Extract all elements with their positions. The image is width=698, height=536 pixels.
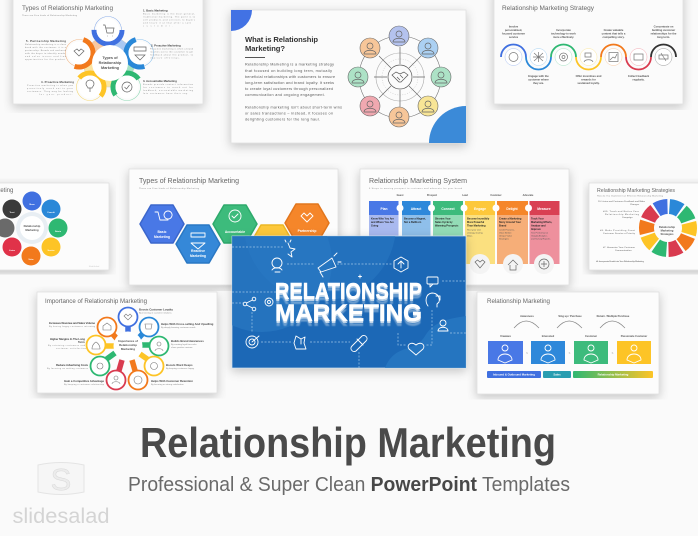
slide: relationship marketing system: Advocate: [523, 194, 534, 197]
slide: relationship marketing system: Story Around Your: [499, 221, 521, 224]
slide: relationship marketing strategies, ring: How do You Implement an Effective Relationship Marketing: [597, 194, 664, 198]
slide: types of relationship marketing, pentagon: Relationship marketing is a close: [25, 43, 67, 46]
slide: circular steps, left edge: Marketing: [25, 228, 39, 232]
slide: relationship marketing strategies, ring: #8. Make Providing Great: [600, 229, 635, 232]
slide: types of relationship marketing, pentagon: [13, 0, 203, 107]
slide: types of relationship marketing, hexagons: There are Five kinds of Relationship Marketing: [139, 187, 200, 190]
slide: relationship marketing system: Sales Cycle by: [435, 221, 453, 224]
hero icons: [243, 240, 448, 355]
slide: relationship marketing strategy, wave: building customer: [652, 28, 675, 32]
network diagram: [348, 26, 451, 127]
slide: types of relationship marketing, pentagon: proactively reach out to your: [27, 87, 73, 90]
hero title: MARKETING: [275, 302, 422, 329]
slide: relationship marketing strategy, wave: Offer incentives and: [576, 74, 602, 78]
slide: relationship marketing strategy, wave: Create valuable: [604, 28, 624, 32]
slide: relationship marketing system: Relationship Marketing System: [369, 178, 467, 185]
slide: relationship marketing system: [360, 169, 569, 285]
slide: types of relationship marketing, pentagon: bond with the customer: it is a: [25, 46, 67, 49]
body text: or sales transactions – instead, it focuses on: [245, 112, 333, 116]
slide: relationship marketing system: Improve: [531, 228, 541, 231]
body text: Relationship Marketing is a marketing strategy: [245, 62, 334, 66]
slide: relationship marketing customer journey: [477, 292, 659, 394]
slide: relationship marketing strategies, ring: Customer Service a Priority: [603, 232, 636, 235]
slide: relationship marketing system: Prospect: [427, 194, 437, 197]
slide: what is relationship marketing: Marketing?: [245, 44, 285, 53]
slide: types of relationship marketing, pentagon: 4. Proactive Marketing: [41, 80, 74, 84]
slide: importance of relationship marketing: Builds Brand Awareness: [171, 339, 204, 343]
slide: types of relationship marketing, hexagons: Basic: [157, 230, 167, 234]
hero title: RELATIONSHIP: [275, 280, 422, 306]
slide: importance of relationship marketing: By focusing on making customers: [47, 367, 89, 370]
slide: types of relationship marketing, pentagon: Types of Relationship Marketing: [22, 5, 113, 12]
slide: importance of relationship marketing: By creating loyal fans who: [171, 343, 197, 346]
slide: relationship marketing system: Unique Value: [499, 236, 513, 238]
slide: circular steps, left edge: Value: [28, 259, 34, 261]
slide: relationship marketing system: Going: [371, 224, 379, 228]
slide: importance of relationship marketing: Higher Margins In The Long: [50, 337, 85, 341]
slide: types of relationship marketing, pentagon: Types of: [102, 56, 118, 60]
slide: relationship marketing system: Value Before: [499, 232, 512, 234]
slide: relationship marketing strategy, wave: they are.: [533, 81, 544, 85]
slide: relationship marketing system: Know Who You Are: [371, 218, 394, 220]
slide: relationship marketing strategy, wave: customer where: [528, 78, 549, 82]
slide: importance of relationship marketing: By focusing on strong satisfaction: [151, 383, 184, 386]
slide: relationship marketing system: More Powerful: [467, 221, 485, 224]
slide: relationship marketing customer journey: Interested: [542, 334, 555, 338]
slide: types of relationship marketing, pentagon: reaches out to the customer to get: [150, 50, 193, 54]
slide: types of relationship marketing, pentagon: partnership. Brands ask and work: [25, 49, 67, 52]
slide: importance of relationship marketing: Boosts Word Keeps: [166, 363, 193, 367]
slide: relationship marketing strategy, wave: more effectively.: [553, 35, 574, 39]
slide: importance of relationship marketing: Term: [78, 340, 85, 344]
slide: importance of relationship marketing: Marketing: [121, 347, 135, 351]
slide: importance of relationship marketing: customer satisfaction: [56, 347, 87, 350]
slide: importance of relationship marketing: By keeping a customer relationship: [64, 383, 105, 386]
slide: circular steps, left edge: Listen: [9, 249, 16, 252]
hero title: MARKETING: [275, 300, 422, 327]
hero title: MARKETING: [275, 305, 422, 332]
slide: relationship marketing strategy, wave: sustained loyalty.: [577, 81, 600, 85]
slide: relationship marketing strategy, wave: Incorporate: [556, 28, 571, 32]
slide: relationship marketing strategy, wave: rewards for: [581, 78, 596, 82]
slide: circular steps, left edge: Service: [47, 250, 55, 252]
slide: relationship marketing strategies, ring: Changes: [630, 204, 640, 206]
slide: relationship marketing customer journey: Inbound & Outbound Marketing: [493, 372, 535, 376]
body text: beneficial relationships with customers to ensure: [245, 75, 335, 79]
slide: relationship marketing customer journey: Relationship Marketing: [487, 299, 550, 305]
slide: relationship marketing system: Connect: [441, 207, 455, 211]
slide: importance of relationship marketing: Importance of: [118, 339, 138, 343]
slide: relationship marketing system: Not a Bullhorn: [404, 221, 422, 224]
slide: relationship marketing strategies, ring: Relationship Marketing Strategies: [597, 188, 675, 194]
slide: types of relationship marketing, pentagon: Relationship: [99, 61, 122, 65]
slide: relationship marketing system: Shorten Your: [435, 218, 451, 220]
hero title: RELATIONSHIP: [275, 278, 422, 304]
slide: relationship marketing customer journey: Customer: [585, 334, 597, 338]
slide: types of relationship marketing, hexagons: [129, 169, 338, 285]
slide: what is relationship marketing: [226, 8, 472, 152]
slide: types of relationship marketing, pentagon: Proactive marketing is when you: [27, 84, 74, 87]
slide: relationship marketing strategy, wave: regularly.: [633, 78, 645, 82]
slide: relationship marketing strategy, wave: Involve: [509, 24, 519, 28]
slide: relationship marketing customer journey: Return / Multiple Purchase: [597, 314, 630, 318]
background blobs: [232, 236, 466, 368]
hero title: [275, 278, 422, 332]
slide: relationship marketing system: Credit Features,: [499, 228, 515, 232]
slide: relationship marketing customer journey: Passionate Customer: [621, 334, 647, 338]
slide: relationship marketing strategy, wave: Engage with the: [528, 74, 549, 78]
slide: relationship marketing system: Attract: [411, 207, 422, 211]
slide: types of relationship marketing, pentagon: Brands provide contact information: [143, 83, 194, 86]
slide: relationship marketing customer journey: >: [569, 351, 571, 355]
slide: relationship marketing strategies, ring: Campaign: [622, 217, 633, 219]
slide: importance of relationship marketing: Importance of Relationship Marketing: [45, 298, 147, 305]
body text: that focused on building long term, mutually: [245, 69, 332, 73]
slide: importance of relationship marketing: Gain a Competitive Advantage: [64, 379, 104, 383]
slide: relationship marketing strategy, wave: [494, 0, 683, 104]
slide: types of relationship marketing, pentagon: feedback, accountable marketing: [143, 89, 194, 92]
slide: importance of relationship marketing: Helps With Customer Retention: [151, 379, 193, 383]
slide: relationship marketing strategy, wave: Concentrate on: [654, 24, 674, 28]
slide: relationship marketing strategy, wave: Collect feedback: [628, 74, 650, 78]
slide: relationship marketing strategies, ring: Strategies: [660, 232, 674, 236]
slide: types of relationship marketing, hexagons: Marketing: [190, 254, 206, 258]
slide: types of relationship marketing, pentagon: 3. Accountable Marketing: [143, 79, 177, 83]
slide: importance of relationship marketing: [37, 292, 217, 393]
slide: relationship marketing system: Delight: [506, 207, 518, 211]
slide: types of relationship marketing, pentagon: for customers to reach out for: [143, 86, 193, 89]
main title: Relationship Marketing: [140, 419, 556, 466]
slide: relationship marketing system: Test Performance: [531, 232, 549, 234]
slide: relationship marketing system: Analyze and: [531, 224, 546, 228]
hero slide: relationship marketing cover: [226, 234, 472, 376]
slide: importance of relationship marketing: By keeping customers happy: [166, 367, 195, 370]
slide: relationship marketing strategies, ring: [589, 183, 698, 270]
slide: relationship marketing strategies, ring: #09. Track and Notice Your: [603, 210, 639, 213]
slide: importance of relationship marketing: Relationship: [119, 343, 137, 347]
slide: relationship marketing system: Engage: [474, 207, 486, 211]
slide: types of relationship marketing, pentagon: Basic marketing is the most general,: [143, 12, 195, 16]
slide: circular steps, left edge: Relationship: [24, 224, 41, 228]
slide: relationship marketing system: Become a Magnet,: [404, 218, 426, 220]
slidesalad logo: S: [51, 462, 71, 497]
slide: relationship marketing customer journey: Relationship Marketing: [598, 372, 629, 376]
slide: relationship marketing system: Lead: [462, 194, 468, 197]
slidesalad logo: slidesalad: [12, 505, 110, 528]
body text: [245, 62, 342, 122]
heading: What is Relationship: [245, 35, 318, 44]
slide: relationship marketing strategies, ring: Relationship: [659, 225, 675, 229]
slide: relationship marketing system: Google Analytics: [531, 234, 548, 238]
slide: types of relationship marketing, pentagon: sell products and services to buyers: [143, 18, 196, 22]
slide: relationship marketing system: Guest: [397, 194, 404, 197]
hero title: RELATIONSHIP: [275, 283, 422, 309]
slide: types of relationship marketing, pentagon: for your product.: [39, 93, 73, 96]
slide: relationship marketing strategy, wave: personalized,: [505, 28, 522, 32]
subtitle: Professional & Super Clean PowerPoint Templates: [128, 473, 570, 496]
slide: types of relationship marketing, hexagons: Accountable: [225, 230, 245, 234]
slide: relationship marketing customer journey: Unaware: [500, 334, 511, 338]
slide: importance of relationship marketing: Reduce Advertising Costs: [56, 363, 88, 367]
slide: relationship marketing strategies, ring: 10. Listen and Customer Feedback and Make: [598, 200, 646, 203]
slide: relationship marketing system: Measure: [537, 207, 551, 211]
body text: to create loyal customers through personalized: [245, 87, 333, 91]
body text: delighting customers for the long haul.: [245, 118, 320, 122]
slide: relationship marketing customer journey: Sales: [553, 372, 561, 376]
slide: relationship marketing strategies, ring: Communication: [615, 249, 632, 252]
dashed connector lines: [232, 247, 466, 368]
slide: importance of relationship marketing: By deeply knowing customer needs: [161, 326, 196, 329]
slide: types of relationship marketing, pentagon: lets customers have their say.: [143, 92, 188, 95]
slide: types of relationship marketing, pentagon: with the buyer to identify needs,: [25, 52, 66, 55]
slide: relationship marketing system: Strategies: [499, 238, 510, 240]
slide: types of relationship marketing, pentagon: customers. They may be looking: [27, 90, 74, 93]
slide: types of relationship marketing, pentagon: Proactive marketing is when a brand: [150, 48, 194, 50]
slide: circular steps, left edge: [0, 183, 109, 270]
slide: relationship marketing strategies, ring: #6. Incorporate Emails into Your Relationship Marketing: [596, 260, 645, 263]
body text: long-term satisfaction and brand loyalty. It seeks: [245, 81, 334, 85]
slide: relationship marketing system: Host your own: [467, 228, 482, 232]
slide: relationship marketing strategies, ring: #7. Humanize Your Customer: [603, 246, 635, 249]
slide: relationship marketing strategy, wave: service: [509, 35, 519, 39]
slide: circular steps, left edge: Share: [29, 204, 36, 206]
slide: importance of relationship marketing: By having happy customers returning: [49, 325, 96, 328]
slide: types of relationship marketing, pentagon: 2. Proactive Marketing: [151, 44, 181, 48]
slide: relationship marketing system: Than Marketing: [467, 224, 486, 228]
slide: types of relationship marketing, pentagon: There are Five kinds of Relationship Marketing: [22, 14, 78, 17]
slide: importance of relationship marketing: share positive reviews: [171, 346, 193, 349]
slide: types of relationship marketing, pentagon: improve offerings.: [150, 56, 180, 60]
slide: relationship marketing strategy, wave: technology to work: [551, 32, 576, 36]
slide: relationship marketing system: Track Your: [531, 218, 544, 220]
slide: relationship marketing strategies, ring: Relationship Marketing: [605, 213, 640, 216]
slide: types of relationship marketing, pentagon: and leave it at that after a sale: [143, 22, 192, 24]
slide: relationship marketing system: Ideas: [467, 236, 473, 238]
corner accents: [231, 10, 466, 143]
slide: types of relationship marketing, pentagon: 5. Partnership Marketing: [26, 39, 66, 43]
slide: types of relationship marketing, pentagon: feedback about the product, to: [150, 54, 194, 56]
body text: communication and ongoing engagement.: [245, 93, 325, 97]
slide: relationship marketing system: Warming Prospects: [435, 224, 459, 228]
slide: types of relationship marketing, pentagon: opportunities for the product.: [25, 58, 66, 61]
slide: relationship marketing customer journey: >: [526, 351, 528, 355]
slide: importance of relationship marketing: Helps With Cross-selling And Upselling: [161, 322, 214, 326]
slide: relationship marketing strategy, wave: Relationship Marketing Strategy: [502, 5, 595, 12]
slide: importance of relationship marketing: Boosts Customer Loyalty: [139, 308, 173, 312]
slide: relationship marketing strategy, wave: focused customer: [502, 32, 525, 36]
slide: circular steps, left edge: Consult: [47, 211, 55, 214]
slide: relationship marketing customer journey: Sing up / Purchase: [558, 314, 582, 318]
slide: relationship marketing strategy, wave: relationships for the: [651, 32, 677, 36]
slide: types of relationship marketing, pentagon: customer.: [143, 24, 173, 28]
slide: relationship marketing system: Become Incredibly: [467, 218, 490, 220]
slide: relationship marketing system: Create a Marketing: [499, 218, 522, 220]
slide: circular steps, left edge: SlideSalad: [89, 266, 100, 268]
slide: relationship marketing system: and Survey Reports: [531, 238, 551, 240]
slide: importance of relationship marketing: By retaining customers and: [48, 344, 86, 347]
slide: types of relationship marketing, hexagons: Types of Relationship Marketing: [139, 178, 239, 185]
slide: relationship marketing system: Brand: [499, 224, 507, 228]
slide: relationship marketing system: and Where You Are: [371, 221, 394, 224]
slide: importance of relationship marketing: Increases Revenue and Sales Volume: [49, 321, 95, 325]
slide: types of relationship marketing, pentagon: Marketing: [101, 66, 120, 70]
slide: relationship marketing strategy, wave: compelling story.: [602, 35, 625, 39]
slide: types of relationship marketing, hexagons: Marketing: [154, 235, 170, 239]
slide: relationship marketing customer journey: Awareness: [520, 314, 534, 318]
slide: relationship marketing system: strategy sharing: [467, 232, 483, 234]
slide: circular steps, left edge: Retain: [55, 230, 62, 233]
slide: relationship marketing system: Customer: [490, 194, 502, 197]
slide: relationship marketing customer journey: >: [612, 351, 614, 355]
slide: types of relationship marketing, pentagon: and solve issues and find: [25, 56, 67, 58]
slide: types of relationship marketing, hexagons: Partnership: [298, 229, 316, 233]
slide: relationship marketing strategy, wave: long term.: [657, 35, 670, 39]
slide: types of relationship marketing, pentagon: 1. Basic Marketing: [143, 8, 168, 12]
slide: relationship marketing system: Plan: [381, 207, 387, 211]
slide: circular steps, left edge: Trust: [10, 211, 15, 214]
slide: relationship marketing system: Marketing Efforts,: [531, 221, 553, 224]
slide: relationship marketing strategies, ring: Marketing: [661, 228, 674, 232]
body text: Relationship marketing isn't about short-term wins: [245, 106, 342, 110]
slide: types of relationship marketing, hexagons: Reactive: [191, 249, 205, 253]
slide: importance of relationship marketing: By investing in customer relations: [139, 312, 172, 314]
slide: types of relationship marketing, pentagon: traditional marketing. The point is to: [143, 16, 196, 18]
slide: relationship marketing strategy, wave: content that tells a: [602, 32, 626, 36]
slide: relationship marketing system: 6 Steps to moving prospect to customer and advocate for your brand: [369, 187, 463, 190]
slidesalad logo: [12, 462, 110, 528]
